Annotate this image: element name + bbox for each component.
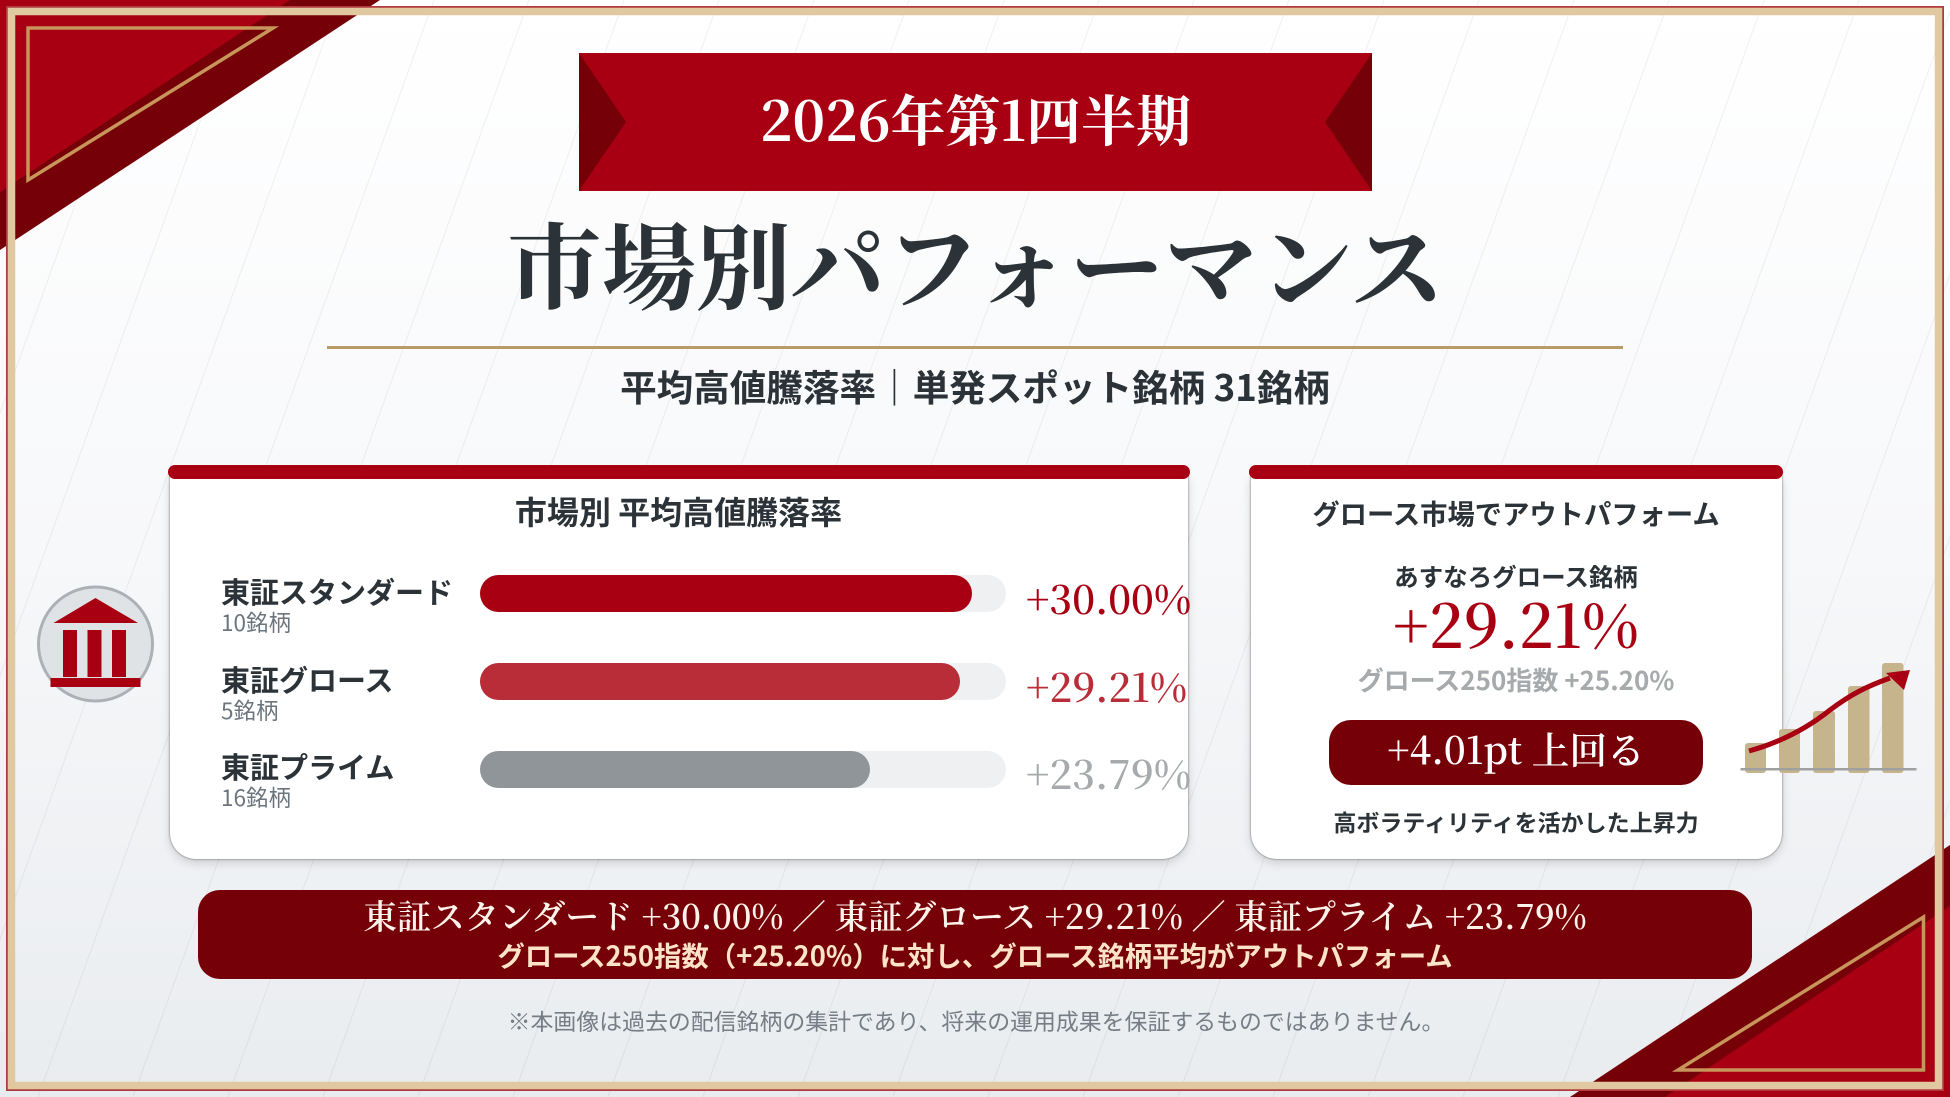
count: 16銘柄: [221, 781, 291, 813]
disclaimer: ※本画像は過去の配信銘柄の集計であり、将来の運用成果を保証するものではありません。: [508, 1003, 1444, 1037]
summary line 1: 東証スタンダード +30.00% ／ 東証グロース +29.21% ／ 東証プライム +23.79%: [363, 890, 1587, 939]
panel heading: 市場別 平均高値騰落率: [515, 488, 842, 534]
row: standard: [221, 570, 1191, 638]
card body: [1251, 475, 1782, 859]
subtitle: 平均高値騰落率｜単発スポット銘柄 31銘柄: [620, 359, 1330, 412]
summary banner: [198, 890, 1752, 979]
card top bar: [1249, 465, 1783, 479]
fund label: あすなろグロース銘柄: [1394, 559, 1638, 594]
difference pill: +4.01pt 上回る: [1387, 721, 1645, 775]
icon: bank building: [37, 586, 154, 702]
value: +29.21%: [1026, 658, 1187, 714]
ribbon notches: [579, 53, 1372, 191]
top ribbon banner: [579, 53, 1372, 191]
value: +30.00%: [1026, 570, 1191, 626]
row: growth: [221, 658, 1187, 726]
bar fill: [480, 575, 972, 612]
count: 5銘柄: [221, 694, 278, 726]
summary line 2: グロース250指数（+25.20%）に対し、グロース銘柄平均がアウトパフォーム: [497, 934, 1453, 974]
bar fill: [480, 663, 960, 700]
label: 東証プライム: [221, 745, 394, 787]
panel heading: グロース市場でアウトパフォーム: [1312, 492, 1720, 532]
panel: market average rates: [166, 465, 1192, 866]
card top bar: [168, 465, 1190, 479]
caption: 高ボラティリティを活かした上昇力: [1333, 804, 1699, 838]
big value: +29.21%: [1393, 580, 1639, 666]
main title: 市場別パフォーマンス: [507, 194, 1445, 330]
icon: rising bar chart with arrow: [1740, 663, 1916, 773]
bar track: [480, 575, 1006, 612]
banner text: 2026年第1四半期: [760, 78, 1191, 157]
row: prime: [221, 745, 1191, 813]
panel: growth outperformance: [1248, 465, 1786, 866]
index comparison: グロース250指数 +25.20%: [1358, 661, 1674, 698]
card body: [170, 475, 1188, 859]
difference pill: [1329, 720, 1703, 785]
value: +23.79%: [1026, 745, 1191, 801]
label: 東証グロース: [221, 658, 394, 700]
bar fill: [480, 751, 870, 788]
label: 東証スタンダード: [221, 570, 453, 612]
count: 10銘柄: [221, 606, 291, 638]
bar track: [480, 751, 1006, 788]
bar track: [480, 663, 1006, 700]
gold divider: [327, 346, 1623, 349]
